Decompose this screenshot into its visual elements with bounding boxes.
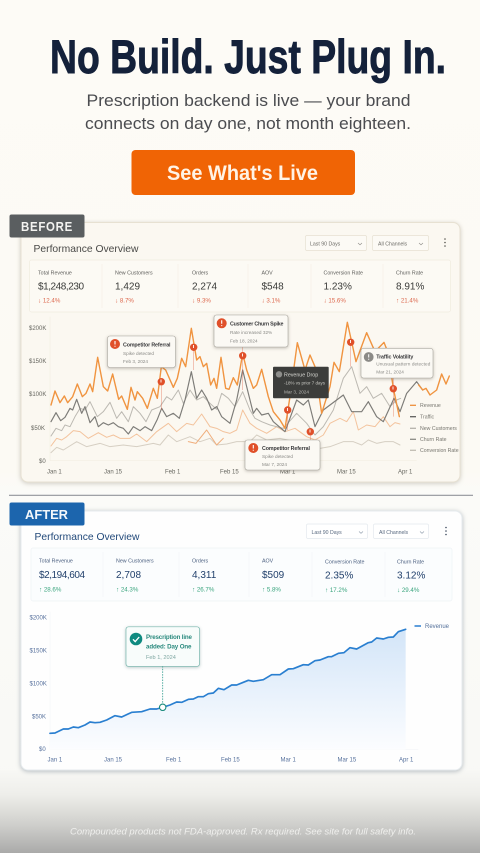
KPI: churn rate <box>397 559 425 594</box>
x axis labels: after: Mar 15 <box>338 758 357 764</box>
KPI: new customers <box>116 559 154 593</box>
callout: customer churn spike <box>214 315 288 347</box>
KPI: new customers: New Customers <box>115 270 153 276</box>
callout: prescription line added: Feb 1, 2024 <box>146 655 176 661</box>
legend: before: New Customers <box>420 426 457 432</box>
KPI: conversion rate <box>324 270 363 304</box>
KPI: churn rate: Churn Rate <box>397 559 424 565</box>
KPI: AOV: AOV <box>262 270 273 276</box>
x axis labels: after: Mar 1 <box>280 758 296 764</box>
KPI: orders: 2,274 <box>192 282 217 292</box>
legend: after <box>414 624 450 630</box>
x axis labels: before: Apr 1 <box>398 470 413 476</box>
KPI: conversion rate: 2.35% <box>325 570 353 582</box>
callout: customer churn spike: Feb 18, 2024 <box>230 338 258 344</box>
x axis labels: after: Apr 1 <box>399 758 414 764</box>
KPI: AOV <box>262 270 284 304</box>
panel: after dashboard <box>21 511 462 770</box>
panel: before dashboard <box>21 222 460 482</box>
callout: customer churn spike: Rate increased 32% <box>230 330 272 335</box>
KPI: AOV: AOV <box>262 559 274 565</box>
menu dots <box>445 527 447 535</box>
KPI: churn rate: Churn Rate <box>396 270 423 276</box>
y axis labels: after: $100K <box>30 682 47 688</box>
x axis labels: after: Jan 15 <box>104 758 123 764</box>
event markers: before <box>158 339 397 435</box>
KPI: churn rate <box>396 270 424 304</box>
call to action button: See What's Live <box>167 162 318 185</box>
callout: prescription line added: Prescription line <box>146 634 193 641</box>
x axis labels: after: Feb 15 <box>221 758 240 764</box>
KPI: orders: ↑ 26.7% <box>192 586 215 593</box>
y axis labels: after: $200K <box>30 616 47 622</box>
callout: prescription line added: added: Day One <box>146 644 192 651</box>
y axis labels: after <box>30 616 47 753</box>
event stems <box>161 342 393 447</box>
KPI: new customers: 1,429 <box>115 282 140 292</box>
x axis labels: before: Feb 15 <box>220 470 239 476</box>
series: churn rate <box>51 410 400 446</box>
callout: revenue drop <box>273 367 329 398</box>
y axis labels: before <box>29 326 46 465</box>
y axis labels: before: $150K <box>29 359 46 365</box>
KPI: new customers: New Customers <box>116 559 154 565</box>
line chart: before multi-series <box>50 317 449 461</box>
series: traffic <box>51 370 423 434</box>
KPI: AOV: ↓ 3.1% <box>262 297 281 304</box>
KPI: total revenue: Total Revenue <box>38 270 72 276</box>
x axis labels: after <box>48 758 414 764</box>
callout: prescription line added <box>126 627 200 666</box>
KPI: total revenue: ↑ 28.6% <box>39 586 62 593</box>
KPI: orders: ↓ 9.3% <box>192 297 211 304</box>
KPI: churn rate: ↑ 21.4% <box>396 297 419 304</box>
callout: revenue drop: Mar 3, 2024 <box>284 389 309 394</box>
callout: revenue drop: Revenue Drop <box>284 372 318 378</box>
legend: before: Traffic <box>420 415 435 421</box>
legend: before <box>410 403 459 454</box>
icon: check <box>130 633 142 645</box>
y axis labels: before: $100K <box>29 392 46 398</box>
KPI: orders <box>192 559 217 593</box>
date range dropdown: Last 90 Days <box>312 530 342 536</box>
badge: before <box>10 214 84 238</box>
KPI: conversion rate: ↓ 15.6% <box>324 297 346 304</box>
callout: revenue drop: -18% vs prior 7 days <box>284 380 326 386</box>
callout: competitor referral Mar 7: Competitor Referral <box>262 446 311 452</box>
badge: before: BEFORE <box>21 219 73 234</box>
x axis labels: after: Feb 1 <box>166 758 182 764</box>
KPI: conversion rate: Conversion Rate <box>325 559 365 565</box>
marker: Feb 1 stem and point <box>160 666 166 710</box>
series: revenue tail <box>419 374 449 395</box>
x axis labels: before: Mar 15 <box>337 470 356 476</box>
y axis labels: before: $50K <box>31 426 45 432</box>
callout: competitor referral Mar 7: Spike detected <box>262 454 293 459</box>
series: new customers <box>51 367 401 436</box>
revenue line <box>50 629 406 733</box>
KPI: AOV: $548 <box>262 282 284 292</box>
KPI: total revenue: $1,248,230 <box>38 282 84 292</box>
legend: before: Revenue <box>420 403 441 409</box>
KPI: AOV: $509 <box>262 570 285 581</box>
callout: competitor referral Feb 3: Feb 3, 2024 <box>123 359 148 364</box>
y axis labels: after: $50K <box>32 714 46 720</box>
KPI: orders: 4,311 <box>192 570 217 581</box>
channel dropdown <box>372 236 428 250</box>
KPI: total revenue: ↓ 12.4% <box>38 297 61 304</box>
subtitle: Prescription backend is live — your brand <box>86 92 411 110</box>
callout: competitor referral Feb 3: Spike detected <box>123 351 154 356</box>
series: revenue <box>51 322 399 428</box>
call to action button <box>132 150 355 195</box>
y axis labels: before: $200K <box>29 326 46 332</box>
KPI: total revenue: $2,194,604 <box>39 570 85 581</box>
revenue area fill <box>50 629 406 749</box>
legend: before: Churn Rate <box>420 437 447 443</box>
callout: competitor referral Feb 3: Competitor Referral <box>123 342 171 348</box>
KPI row: after <box>31 548 452 601</box>
KPI: AOV: ↑ 5.8% <box>262 586 281 593</box>
legend: before: Conversion Rate <box>420 448 459 454</box>
KPI: churn rate: 3.12% <box>397 570 425 582</box>
KPI: AOV <box>262 559 285 593</box>
date range dropdown <box>306 524 368 538</box>
y axis labels: after: $150K <box>30 648 47 654</box>
channel dropdown <box>374 524 428 538</box>
x axis labels: before: Mar 1 <box>280 470 296 476</box>
callout: traffic volatility: Traffic Volatility <box>376 354 413 360</box>
callout: traffic volatility: Mar 21, 2024 <box>376 369 404 374</box>
subtitle: connects on day one, not month eighteen. <box>85 115 411 133</box>
callout: traffic volatility: Unusual pattern detected <box>376 362 431 367</box>
callout: traffic volatility <box>361 348 433 378</box>
y axis labels: after: $0 <box>39 747 46 753</box>
KPI: orders: Orders <box>192 270 209 276</box>
KPI: churn rate: ↓ 29.4% <box>397 587 420 594</box>
channel dropdown: All Channels <box>379 530 409 536</box>
KPI: churn rate: 8.91% <box>396 282 424 292</box>
KPI: orders: Orders <box>192 559 209 565</box>
date range dropdown: Last 90 Days <box>310 242 341 248</box>
KPI: new customers <box>115 270 153 304</box>
KPI: conversion rate: 1.23% <box>324 282 352 292</box>
channel dropdown: All Channels <box>378 242 408 248</box>
KPI: conversion rate: Conversion Rate <box>324 270 363 276</box>
KPI: new customers: ↑ 24.3% <box>116 586 139 593</box>
x axis labels: before: Jan 1 <box>47 470 62 476</box>
callout: customer churn spike: Customer Churn Spike <box>230 322 284 328</box>
badge: after: AFTER <box>25 507 69 522</box>
callout: competitor referral Feb 3 <box>108 336 176 368</box>
legend: after: Revenue <box>425 624 450 630</box>
KPI row: before <box>30 260 450 312</box>
footer disclaimer: Compounded products not FDA-approved. Rx required. See site for full safety info. <box>70 826 416 838</box>
x axis labels: after: Jan 1 <box>48 758 63 764</box>
KPI: total revenue: Total Revenue <box>39 559 73 565</box>
heading: after performance overview: Performance Overview <box>34 531 140 543</box>
callout: competitor referral Mar 7 <box>245 440 320 470</box>
heading: before performance overview: Performance Overview <box>34 243 139 255</box>
x axis labels: before: Feb 1 <box>165 470 181 476</box>
KPI: conversion rate <box>325 559 365 594</box>
x axis labels: before <box>47 470 413 476</box>
callout: competitor referral Mar 7: Mar 7, 2024 <box>262 462 287 467</box>
x axis labels: before: Jan 15 <box>104 470 123 476</box>
KPI: total revenue <box>39 559 85 593</box>
KPI: new customers: 2,708 <box>116 570 141 581</box>
KPI: orders <box>192 270 217 304</box>
series: conversion rate <box>51 435 400 453</box>
KPI: new customers: ↓ 8.7% <box>115 297 134 304</box>
menu dots <box>444 238 446 247</box>
y axis labels: before: $0 <box>39 459 46 465</box>
date range dropdown <box>306 236 366 250</box>
KPI: conversion rate: ↑ 17.2% <box>325 587 348 594</box>
series: orange secondary <box>188 430 223 445</box>
KPI: total revenue <box>38 270 84 304</box>
badge: after <box>10 502 84 526</box>
area chart: after revenue <box>50 612 418 749</box>
subtitle <box>85 92 411 133</box>
